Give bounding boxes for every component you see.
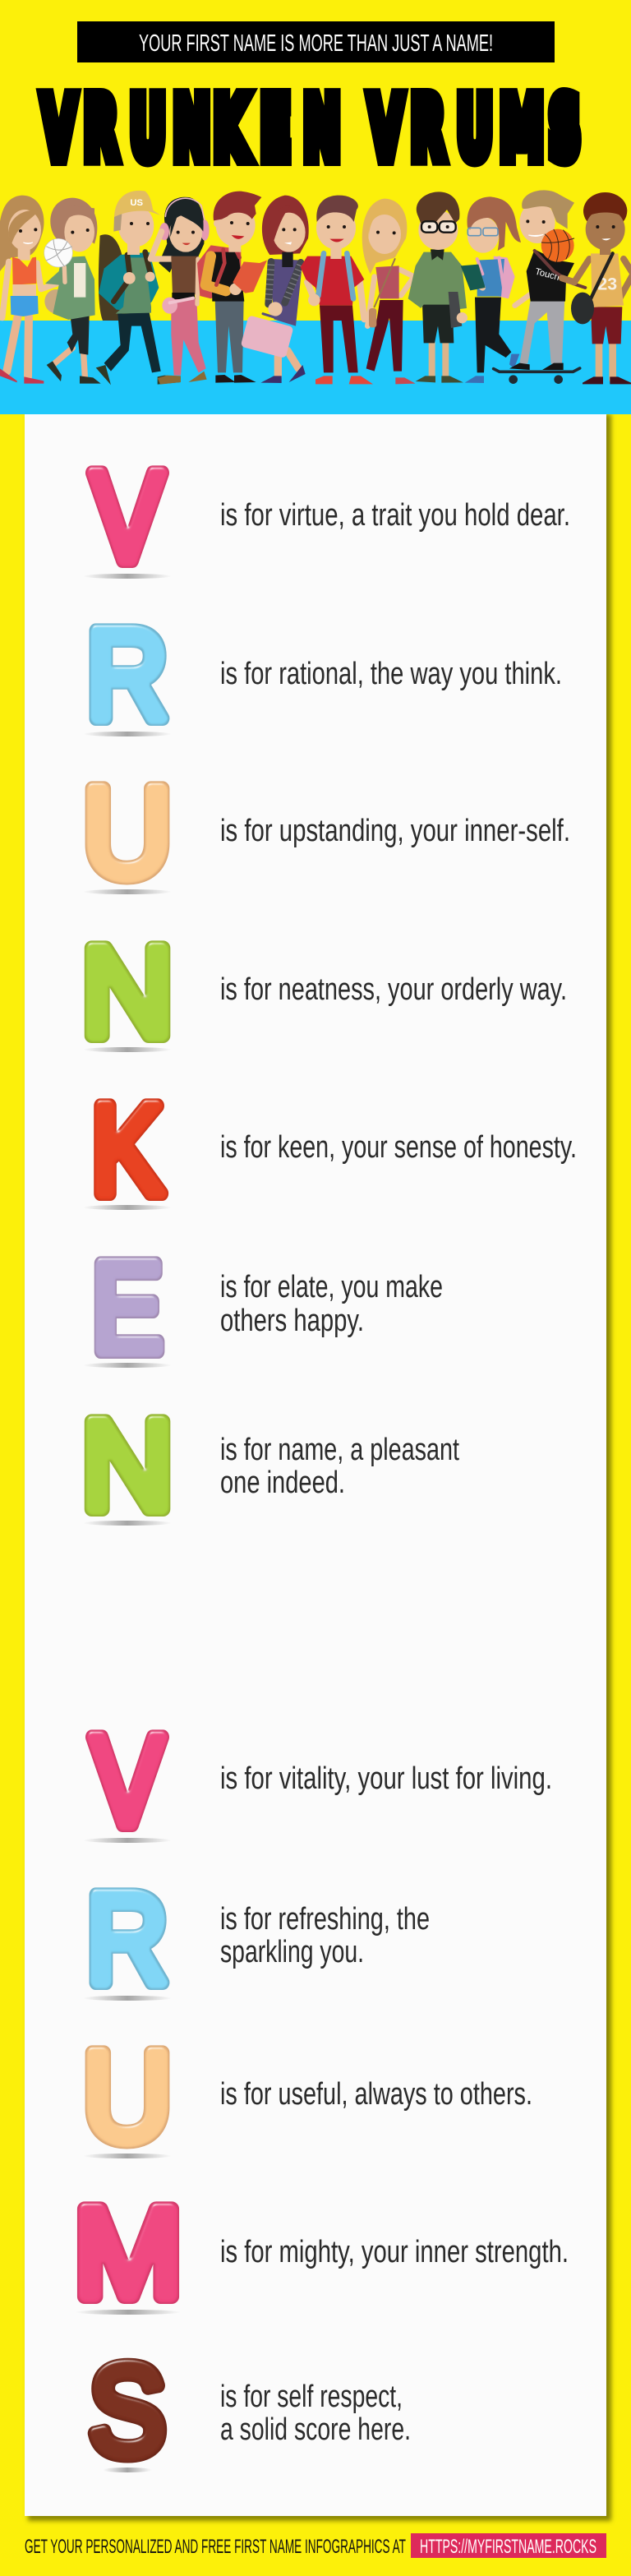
student: girl with volleyball	[44, 198, 101, 384]
row: U useful	[83, 2026, 532, 2167]
student: boy with cap and backpack	[96, 191, 181, 385]
row: M mighty: M	[74, 2181, 182, 2324]
row: V vitality: V	[91, 1710, 164, 1852]
tagline banner	[77, 21, 555, 62]
row: R refreshing: sparkling you.	[220, 1935, 364, 1969]
row: N name: one indeed.	[220, 1466, 345, 1500]
row: S self respect	[89, 2340, 411, 2482]
row: E elate: others happy.	[220, 1304, 364, 1338]
row: R refreshing: R	[86, 1868, 168, 2010]
row: K keen: K	[91, 1079, 164, 1221]
row: U upstanding: U	[83, 762, 172, 903]
title: VRUNKEN VRUMS	[42, 81, 581, 178]
student: girl with ponytail and tablet	[461, 196, 521, 383]
row: S self respect: S	[89, 2340, 166, 2482]
student: boy in red tee	[301, 196, 373, 384]
student: boy in yellow jersey	[562, 192, 631, 384]
panel shadow	[28, 414, 611, 2521]
row: U useful: is for useful, always to others.	[220, 2077, 532, 2112]
student: blonde girl	[362, 199, 416, 384]
row: R refreshing	[83, 1868, 430, 2010]
row: N name: N	[81, 1394, 173, 1536]
row: S self respect: is for self respect,	[220, 2380, 403, 2414]
student: girl with pink suitcase	[241, 196, 309, 383]
student: boy on skateboard with basketball	[494, 190, 585, 384]
row: V virtue	[83, 446, 570, 588]
row: N neatness	[81, 921, 567, 1063]
row: N neatness: N	[81, 921, 173, 1063]
blue floor band	[0, 321, 631, 414]
row: N name	[81, 1394, 459, 1536]
row: V virtue: V	[91, 446, 164, 588]
row: V vitality	[83, 1710, 552, 1852]
row: R refreshing: is for refreshing, the	[220, 1902, 430, 1937]
row: E elate: is for elate, you make	[220, 1270, 443, 1304]
row: E elate: E	[92, 1236, 163, 1379]
student: boy with cap and backpack: US	[130, 198, 144, 208]
student: boy reading a book	[197, 192, 267, 383]
row: M mighty	[74, 2181, 569, 2324]
student: boy on skateboard with basketball: Touch	[534, 267, 560, 283]
row: R rational	[83, 604, 562, 746]
row: U upstanding	[83, 762, 570, 903]
illustration: row of students	[0, 190, 631, 385]
student: girl with headphones	[150, 197, 210, 385]
row: R rational: R	[86, 604, 168, 746]
row: E elate	[83, 1236, 443, 1379]
student: girl in orange top	[0, 196, 64, 384]
student: boy in yellow jersey: 23	[597, 275, 617, 294]
student: boy with glasses and green sweater	[408, 192, 467, 383]
row: U useful: U	[83, 2026, 172, 2167]
row: K keen	[83, 1079, 577, 1221]
row: S self respect: a solid score here.	[220, 2412, 411, 2447]
panel: white letter card	[25, 414, 606, 2516]
row: N name: is for name, a pleasant	[220, 1433, 459, 1467]
